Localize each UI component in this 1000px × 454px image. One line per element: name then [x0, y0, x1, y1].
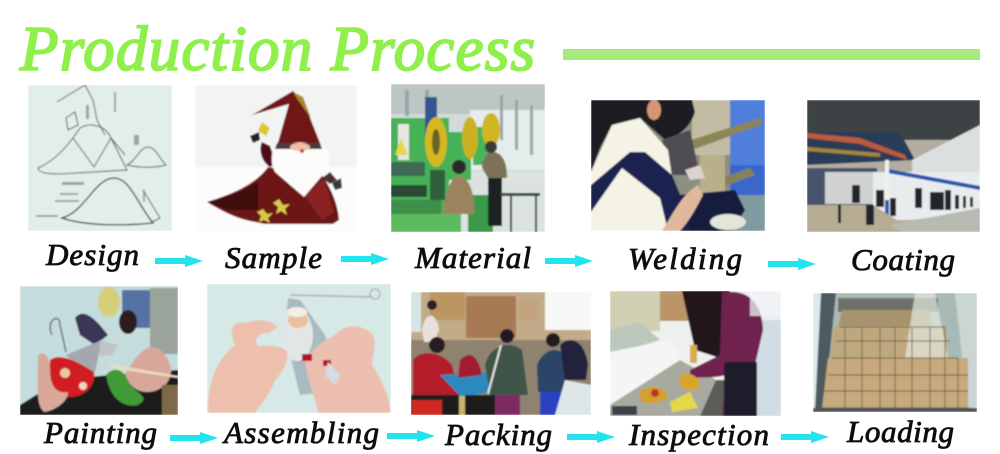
photo: factory press machines — [391, 84, 545, 232]
panel: loading — [813, 293, 977, 449]
panel: assembling — [207, 284, 391, 450]
label: Assembling: Assembling — [222, 415, 379, 450]
label: Design: Design — [45, 237, 139, 272]
photo: cartons loaded in container — [813, 293, 977, 412]
title rule — [563, 49, 980, 60]
arrow: design to sample — [155, 255, 203, 267]
photo: hand painting ornament — [20, 286, 178, 415]
panel: packing — [411, 292, 591, 452]
photo: inspection table — [610, 291, 781, 416]
panel: coating — [807, 100, 980, 277]
title: Production Process — [19, 14, 535, 84]
photo: coating line — [807, 100, 980, 232]
label: Material: Material — [414, 240, 531, 275]
panel: inspection — [610, 291, 781, 452]
label: Welding: Welding — [628, 241, 742, 276]
photo: welder at work — [591, 100, 765, 231]
photo: workers packing — [411, 292, 591, 415]
panel: design — [28, 85, 172, 272]
label: Painting: Painting — [43, 415, 157, 450]
label: Loading: Loading — [846, 414, 954, 449]
label: Sample: Sample — [225, 240, 322, 275]
arrow: material to welding — [545, 255, 593, 267]
arrow: inspection to loading — [781, 431, 829, 443]
panel: welding — [591, 100, 765, 276]
photo: design sketch — [28, 85, 172, 231]
photo: hands assembling ornament — [207, 284, 391, 413]
arrow: packing to inspection — [567, 431, 615, 443]
label: Inspection: Inspection — [628, 417, 769, 452]
arrow: painting to assembling — [170, 432, 218, 444]
arrow: welding to coating — [768, 258, 816, 270]
panel: material — [391, 84, 545, 275]
label: Coating: Coating — [851, 242, 955, 277]
label: Packing: Packing — [444, 417, 552, 452]
panel: painting — [20, 286, 178, 450]
arrow: assembling to packing — [387, 430, 435, 442]
panel: sample — [195, 85, 357, 275]
photo: santa sample — [195, 85, 357, 225]
arrow: sample to material — [341, 253, 389, 265]
